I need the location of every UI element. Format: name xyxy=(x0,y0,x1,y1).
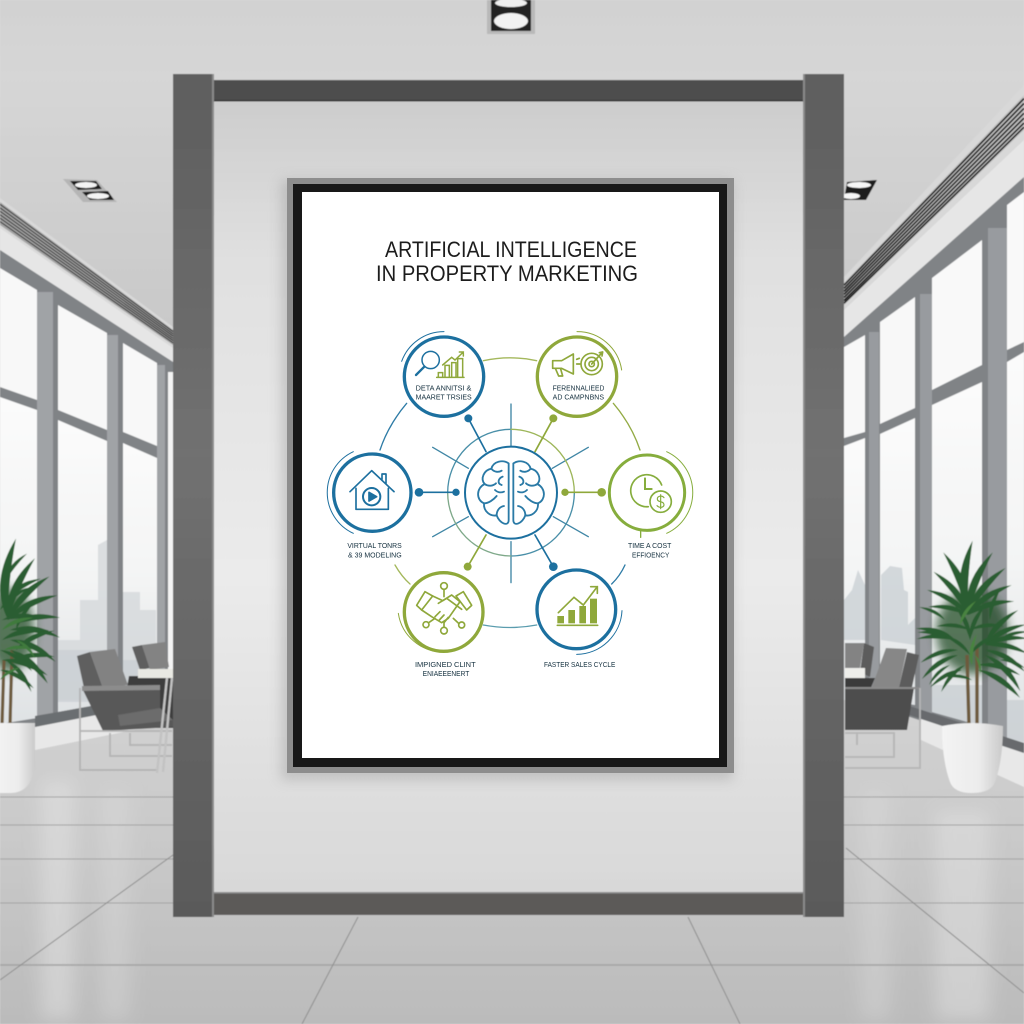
ceiling xyxy=(0,0,1024,380)
node: time and cost xyxy=(609,452,693,559)
distant skyline left xyxy=(58,540,156,700)
poster shadow xyxy=(281,180,733,780)
connecting ring arcs xyxy=(380,358,641,627)
icon: clock and dollar xyxy=(631,475,671,512)
right pot xyxy=(942,723,1003,793)
right window wall xyxy=(844,130,1024,787)
title xyxy=(376,237,638,286)
back wall xyxy=(214,100,803,894)
node: time and cost: TIME A COST xyxy=(628,541,672,550)
node: client engagement: IMPIGNED CLINT xyxy=(415,660,476,669)
right plant xyxy=(916,541,1024,725)
floor xyxy=(0,700,1024,1024)
title: ARTIFICIAL INTELLIGENCE xyxy=(385,237,637,262)
node: client engagement xyxy=(398,573,483,678)
node: data analysis: MAARET TRSIES xyxy=(416,393,472,402)
node: personalized ads xyxy=(537,332,622,416)
node: time and cost: EFFIOENCY xyxy=(632,550,669,559)
left ceiling vent xyxy=(0,198,173,348)
node: virtual tours: & 39 MODELING xyxy=(348,550,402,559)
dot connectors xyxy=(415,414,606,571)
node: faster sales cycle xyxy=(537,570,622,669)
node: virtual tours: VIRTUAL TONRS xyxy=(347,541,402,550)
outer hub ring xyxy=(448,429,574,556)
right window sill xyxy=(921,718,1024,787)
icon: house with play button xyxy=(350,471,394,509)
icon: magnifier and chart xyxy=(416,351,464,377)
node: virtual tours xyxy=(327,452,411,559)
floor reflections xyxy=(40,780,990,1020)
node: data analysis xyxy=(402,332,484,416)
floor tile lines xyxy=(0,797,1024,1024)
node: personalized ads: FERENNALIEED xyxy=(553,384,605,393)
node: client engagement: ENIAEEENERT xyxy=(423,669,470,678)
left window sill xyxy=(35,700,173,750)
distant skyline right xyxy=(844,566,915,645)
node: data analysis: DETA ANNITSI & xyxy=(416,384,471,393)
column right xyxy=(803,74,844,917)
icon: handshake network xyxy=(417,583,472,634)
ceiling light top xyxy=(487,0,535,34)
top beam xyxy=(214,80,803,102)
poster frame xyxy=(287,178,734,773)
node: faster sales cycle: FASTER SALES CYCLE xyxy=(544,660,615,669)
bottom beam xyxy=(214,892,803,915)
center brain icon xyxy=(465,447,557,539)
radial spokes xyxy=(433,404,588,583)
left chairs and table xyxy=(77,642,173,773)
left plant xyxy=(0,538,61,725)
right ceiling vent xyxy=(844,85,1024,310)
right chairs and table xyxy=(845,643,920,768)
node: personalized ads: AD CAMPNBNS xyxy=(553,393,604,402)
ceiling light right xyxy=(842,180,877,200)
left pot xyxy=(0,723,35,793)
title: IN PROPERTY MARKETING xyxy=(376,261,638,286)
column left xyxy=(173,74,214,917)
icon: growth bars xyxy=(557,587,598,625)
ceiling light left xyxy=(63,179,117,202)
icon: megaphone and target xyxy=(553,352,603,376)
left window wall xyxy=(0,225,173,750)
hub and spoke diagram xyxy=(327,332,693,678)
